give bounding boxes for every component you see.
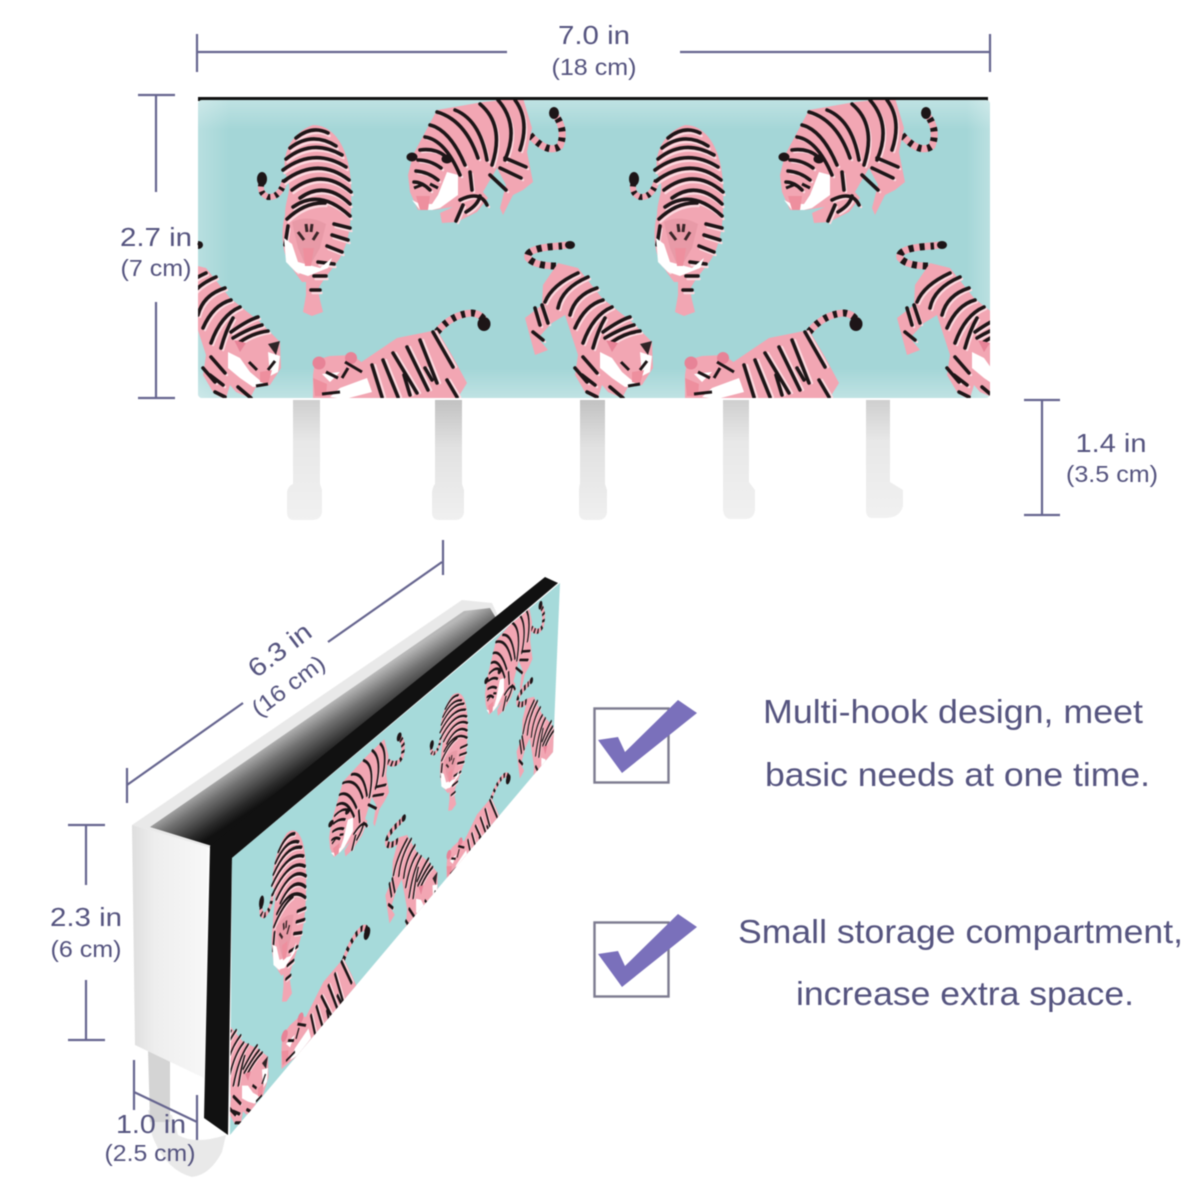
tiger: low stance, far bbox=[446, 770, 511, 880]
dimension: hook length 1.4 in: (3.5 cm) bbox=[1066, 461, 1158, 487]
tiger: crouching, near bbox=[328, 732, 406, 858]
tiger: crouching, top right bbox=[778, 98, 934, 223]
dimension: height 2.7 in bbox=[120, 95, 192, 398]
tiger: prowling, cropped left bbox=[197, 240, 282, 399]
feature text one bbox=[763, 693, 1150, 793]
tiger: prowling, cropped near bbox=[229, 1027, 269, 1126]
dimension: width 1.0 in: 1.0 in bbox=[116, 1109, 186, 1139]
tiger: walking down, right bbox=[629, 125, 724, 316]
tiger: prowling, cropped right bbox=[896, 240, 991, 399]
angled view of storage box bbox=[132, 577, 560, 1177]
feature text two: Small storage compartment, bbox=[738, 913, 1183, 950]
icon: checkbox one bbox=[594, 700, 697, 782]
tiger: crouching, top left bbox=[406, 98, 562, 223]
dimension: width 7.0 in bbox=[197, 20, 990, 80]
tiger: low stance, near bbox=[281, 921, 370, 1069]
dimension: width 1.0 in: (2.5 cm) bbox=[104, 1140, 196, 1166]
tiger: prowling, far bbox=[516, 676, 555, 778]
box interior bbox=[150, 608, 496, 846]
feature text one: basic needs at one time. bbox=[765, 756, 1150, 793]
box rim bbox=[132, 600, 498, 848]
feature text two: increase extra space. bbox=[796, 975, 1134, 1012]
front view panel with tiger pattern bbox=[153, 97, 1025, 400]
dimension: width 7.0 in: (18 cm) bbox=[552, 54, 636, 80]
dimension: height 2.7 in: 2.7 in bbox=[120, 222, 192, 252]
dimension: height 2.7 in: (7 cm) bbox=[120, 255, 192, 281]
dimension: depth 6.3 in bbox=[127, 540, 443, 803]
box side wall bbox=[132, 825, 208, 1078]
tiger: walking down, near bbox=[258, 830, 308, 1002]
dimension: height 2.3 in: (6 cm) bbox=[50, 936, 122, 962]
tiger: prowling, middle bbox=[384, 814, 438, 926]
tiger: prowling, centre bbox=[525, 241, 653, 400]
dimension: width 1.0 in bbox=[104, 1060, 197, 1166]
dimension: height 2.3 in bbox=[50, 825, 122, 1040]
five white hooks bbox=[287, 400, 903, 520]
dimension: depth 6.3 in: 6.3 in bbox=[242, 616, 317, 683]
tiger: low stance, right bbox=[684, 313, 862, 399]
tiger: low stance, left bbox=[312, 313, 490, 399]
icon: checkbox two bbox=[594, 914, 697, 996]
tiger: walking down, far bbox=[429, 692, 469, 812]
tiger: crouching, far bbox=[484, 592, 544, 727]
feature text two bbox=[738, 913, 1183, 1012]
angled panel with tiger pattern bbox=[204, 583, 560, 1154]
dimension: hook length 1.4 in bbox=[1024, 400, 1158, 515]
dimension: hook length 1.4 in: 1.4 in bbox=[1076, 428, 1146, 458]
dimension: depth 6.3 in: (16 cm) bbox=[246, 650, 330, 722]
black front edge bbox=[204, 577, 558, 1135]
feature text one: Multi-hook design, meet bbox=[763, 693, 1143, 730]
dimension: width 7.0 in: 7.0 in bbox=[558, 20, 630, 50]
tiger: walking down, left bbox=[257, 125, 352, 316]
hook below box bbox=[148, 1050, 226, 1177]
dimension: height 2.3 in: 2.3 in bbox=[50, 902, 122, 932]
